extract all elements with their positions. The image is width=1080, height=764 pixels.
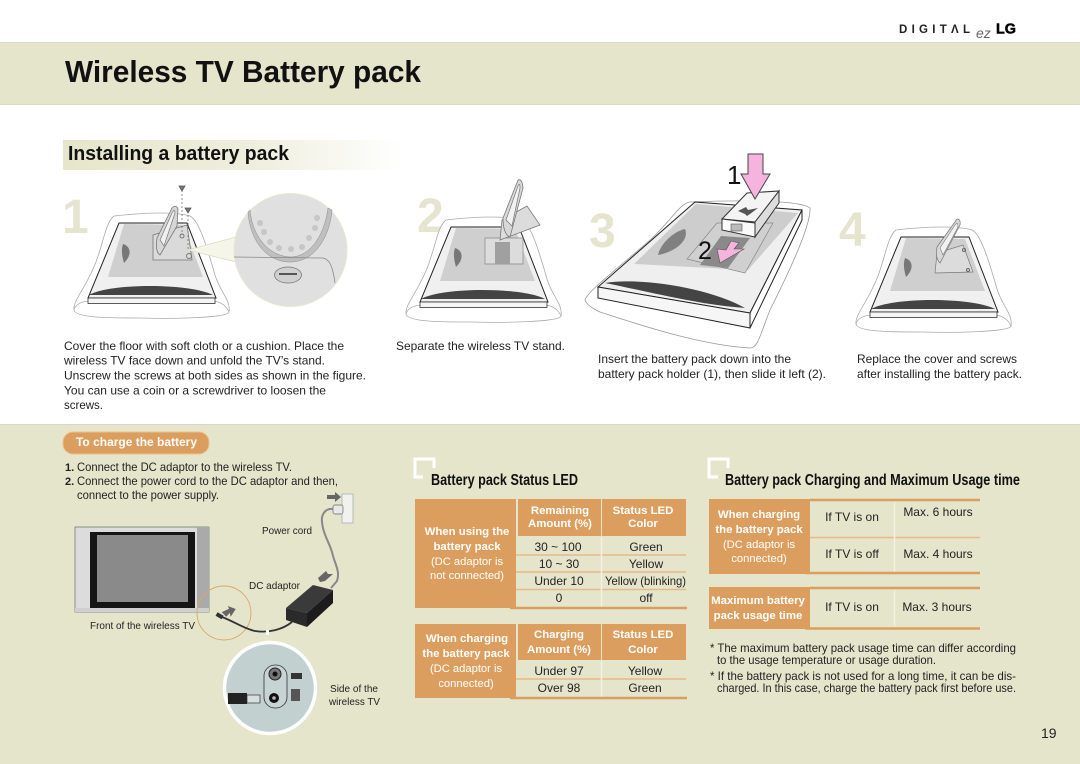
table: charging the battery pack: Amount (%) <box>527 644 591 656</box>
step 1 text: Unscrew the screws at both sides as shown in the figure. <box>64 368 366 382</box>
step 3 text <box>598 352 826 381</box>
table: charging time: When charging <box>718 509 800 521</box>
step 3 illustration <box>585 154 810 348</box>
side view label: wireless TV <box>328 696 380 708</box>
magnifier <box>188 194 347 306</box>
DC adaptor <box>286 571 333 627</box>
step 4 illustration <box>856 219 1011 332</box>
charge instructions: 1. <box>65 462 74 474</box>
side view circle <box>224 642 316 734</box>
TV front illustration <box>75 527 209 612</box>
table: charging time: (DC adaptor is <box>723 539 795 551</box>
heading: charging and usage time <box>709 459 1020 489</box>
table: using the battery pack: Remaining <box>531 505 589 517</box>
brand logo: LG <box>996 22 1016 38</box>
step 1 text: screws. <box>64 398 103 412</box>
brand logo: ez <box>976 25 991 41</box>
heading: charging and usage time: Battery pack Charging and Maximum Usage time <box>725 472 1020 489</box>
brand logo: DIGITΛL <box>899 24 970 36</box>
table: using the battery pack: Color <box>628 518 658 530</box>
table: charging the battery pack <box>415 624 687 698</box>
step 3 text: Insert the battery pack down into the <box>598 352 791 366</box>
cord labels: DC adaptor <box>249 580 300 592</box>
table: max usage time <box>709 587 980 629</box>
DC cable <box>216 604 292 635</box>
power cord <box>322 509 338 588</box>
table: charging time: the battery pack <box>715 524 803 536</box>
table: charging the battery pack: When charging <box>426 633 508 645</box>
charge instructions <box>65 460 338 502</box>
step 1 text: wireless TV face down and unfold the TV’s stand. <box>63 354 325 368</box>
heading: status LED <box>415 459 578 489</box>
table: using the battery pack: off <box>639 591 653 605</box>
brand logo <box>899 22 1016 41</box>
table: using the battery pack: Yellow (blinking) <box>605 574 686 588</box>
arrow 1 <box>741 154 770 199</box>
step 1 text <box>63 339 366 412</box>
step 4 number: 4 <box>839 204 866 257</box>
footnotes: * The maximum battery pack usage time can differ according <box>710 641 1016 655</box>
charge instructions: Connect the power cord to the DC adaptor and then, <box>77 474 338 488</box>
table: using the battery pack: 0 <box>556 591 563 605</box>
side view label <box>328 683 380 708</box>
section heading: installing: Installing a battery pack <box>68 143 290 165</box>
table: using the battery pack <box>415 499 687 608</box>
table: using the battery pack: Yellow <box>629 557 663 571</box>
step 4 text: Replace the cover and screws <box>857 352 1017 366</box>
charge instructions: Connect the DC adaptor to the wireless TV. <box>77 460 292 474</box>
step 2 text: Separate the wireless TV stand. <box>396 339 565 353</box>
table: max usage time: If TV is on <box>825 600 879 614</box>
charge instructions: 2. <box>65 476 74 488</box>
table: using the battery pack: 30 ~ 100 <box>534 540 582 554</box>
orange highlight circle <box>197 586 251 640</box>
label 1: 1 <box>727 160 741 190</box>
charge pill <box>63 432 209 454</box>
cord labels: Front of the wireless TV <box>90 620 195 632</box>
table: charging time <box>709 499 980 574</box>
table: max usage time: Max. 3 hours <box>902 600 972 614</box>
cord labels: Power cord <box>262 525 312 537</box>
table: max usage time: Maximum battery <box>711 595 806 607</box>
footnotes <box>710 641 1016 695</box>
table: using the battery pack: Status LED <box>613 505 673 517</box>
table: charging the battery pack: Under 97 <box>534 664 584 678</box>
footnotes: * If the battery pack is not used for a long time, it can be dis- <box>710 669 1016 683</box>
table: charging the battery pack: connected) <box>438 678 494 690</box>
table: charging time: If TV is off <box>825 547 879 561</box>
table: max usage time: pack usage time <box>714 610 802 622</box>
charge pill: To charge the battery <box>76 437 198 449</box>
footnotes: to the usage temperature or usage duration. <box>717 653 936 667</box>
label 2: 2 <box>698 237 712 265</box>
step 4 text: after installing the battery pack. <box>857 367 1022 381</box>
footnotes: charged. In this case, charge the battery pack first before use. <box>717 681 1016 695</box>
section heading: installing <box>63 140 403 170</box>
table: charging the battery pack: Status LED <box>613 629 673 641</box>
step 2 number: 2 <box>417 190 444 243</box>
step 1 number: 1 <box>62 191 89 244</box>
cord labels <box>90 525 312 632</box>
table: using the battery pack: (DC adaptor is <box>431 556 503 568</box>
wall socket <box>327 492 353 523</box>
table: charging the battery pack: (DC adaptor is <box>430 663 502 675</box>
table: charging the battery pack: Charging <box>534 629 584 641</box>
arrow 2 <box>717 241 744 263</box>
table: using the battery pack: Under 10 <box>534 574 584 588</box>
side view label: Side of the <box>330 683 378 695</box>
step 1 illustration <box>74 186 347 318</box>
heading: status LED: Battery pack Status LED <box>431 472 578 489</box>
table: charging time: Max. 4 hours <box>903 547 973 561</box>
lower panel background <box>0 424 1080 764</box>
charge instructions: connect to the power supply. <box>77 488 219 502</box>
table: charging time: Max. 6 hours <box>903 505 973 519</box>
table: using the battery pack: Amount (%) <box>528 518 592 530</box>
page number: 19 <box>1041 725 1057 741</box>
step 1 text: Cover the floor with soft cloth or a cushion. Place the <box>64 339 344 353</box>
battery pack <box>722 191 779 237</box>
table: using the battery pack: battery pack <box>433 541 501 553</box>
title band <box>0 42 1080 105</box>
step 2 illustration <box>406 180 561 322</box>
table: charging the battery pack: Over 98 <box>538 681 581 695</box>
table: charging the battery pack: the battery pack <box>422 648 510 660</box>
step 3 text: battery pack holder (1), then slide it left (2). <box>598 367 826 381</box>
table: charging the battery pack: Green <box>628 681 662 695</box>
table: charging the battery pack: Color <box>628 644 658 656</box>
step 3 number: 3 <box>589 205 616 258</box>
step 1 text: You can use a coin or a screwdriver to loosen the <box>64 384 326 398</box>
table: charging time: connected) <box>731 553 787 565</box>
table: using the battery pack: not connected) <box>430 570 504 582</box>
table: charging time: If TV is on <box>825 510 879 524</box>
table: using the battery pack: 10 ~ 30 <box>539 557 580 571</box>
table: charging the battery pack: Yellow <box>628 664 662 678</box>
table: using the battery pack: When using the <box>425 526 509 538</box>
title: Wireless TV Battery pack <box>65 54 422 89</box>
step 4 text <box>857 352 1022 381</box>
table: using the battery pack: Green <box>629 540 663 554</box>
